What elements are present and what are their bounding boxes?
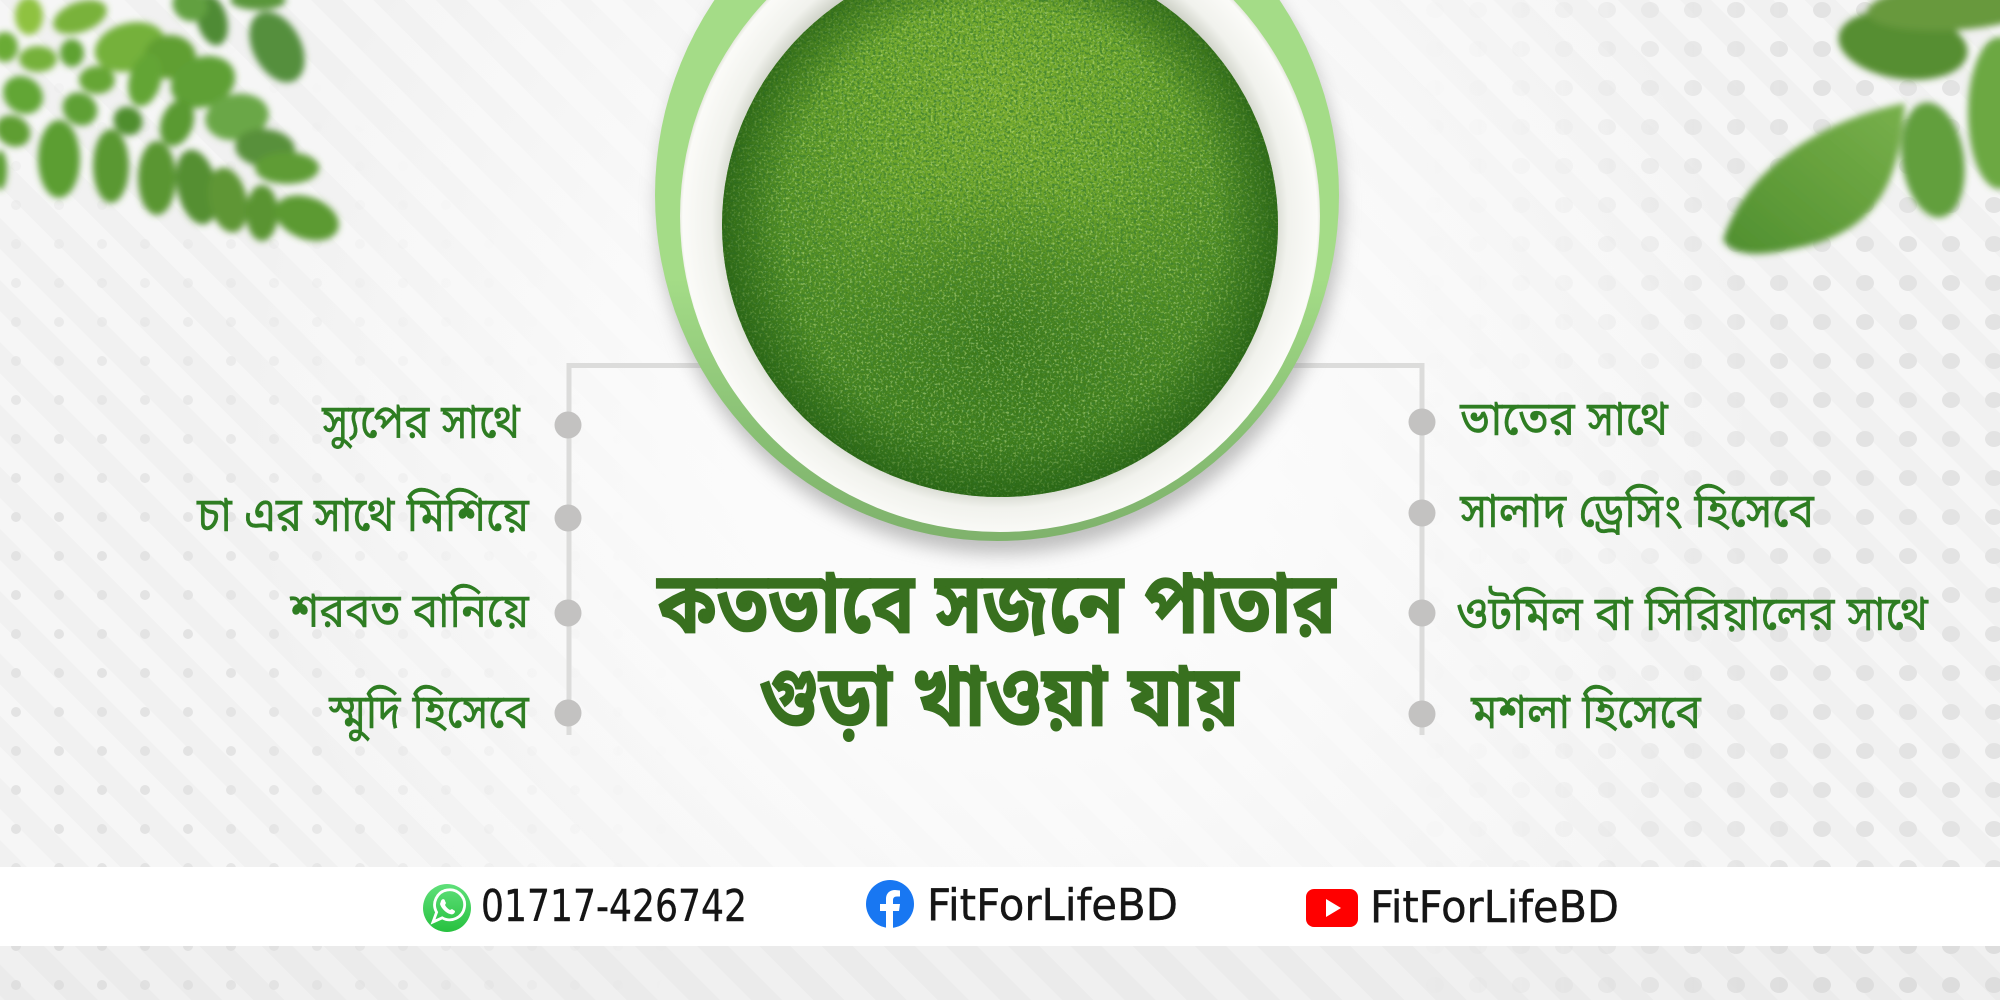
right list of uses — [1408, 393, 1929, 739]
youtube handle: FitForLifeBD — [1370, 882, 1619, 933]
dot and text: soup: স্যুপের সাথে — [321, 396, 521, 449]
dot and text: tea: চা এর সাথে মিশিয়ে — [196, 487, 530, 542]
title: গুড়া খাওয়া যায় — [759, 649, 1240, 745]
icon: whatsapp — [423, 884, 471, 932]
footer contact band — [0, 867, 2000, 946]
icon: facebook — [866, 880, 914, 928]
title — [656, 556, 1337, 745]
phone number: 01717-426742 — [481, 881, 747, 932]
icon: youtube — [1306, 889, 1358, 927]
connector lines — [569, 366, 1422, 735]
dot and text: rice: ভাতের সাথে — [1459, 393, 1669, 446]
white bowl — [680, 0, 1320, 532]
dot and text: salad dressing: সালাদ ড্রেসিং হিসেবে — [1459, 483, 1815, 538]
dot and text: oatmeal: ওটমিল বা সিরিয়ালের সাথে — [1456, 586, 1929, 641]
dot and text: sherbet: শরবত বানিয়ে — [289, 583, 530, 638]
leaves: top left blurred moringa — [0, 0, 345, 249]
leaves: top right blurred moringa — [1723, 0, 2000, 254]
facebook handle: FitForLifeBD — [927, 880, 1178, 931]
title: কতভাবে সজনে পাতার — [656, 556, 1337, 652]
dot and text: spice: মশলা হিসেবে — [1470, 684, 1702, 739]
center bowl of moringa powder — [655, 0, 1342, 554]
dot and text: smoothie: স্মুদি হিসেবে — [328, 684, 530, 742]
bowl shadow — [658, 0, 1342, 554]
green circle behind bowl — [655, 0, 1339, 541]
left list of uses — [196, 396, 581, 742]
powder — [720, 0, 1280, 500]
